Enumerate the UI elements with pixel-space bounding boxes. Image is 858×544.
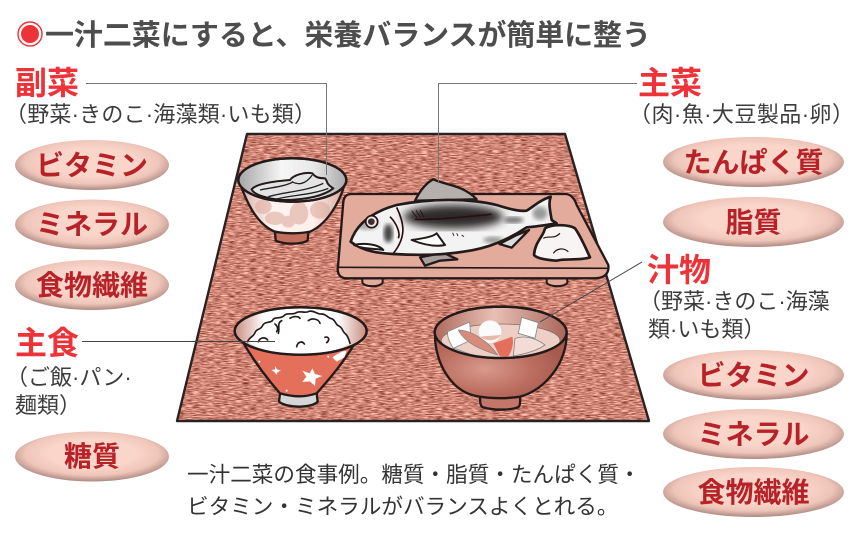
table mat bbox=[177, 134, 649, 421]
pill: ミネラル bbox=[663, 409, 844, 459]
pill: たんぱく質: たんぱく質 bbox=[683, 147, 824, 178]
pill: ミネラル: ミネラル bbox=[36, 209, 148, 240]
caption: 一汁二菜の食事例。糖質・脂質・たんぱく質・ bbox=[187, 462, 640, 487]
note: 主食 foods: 麺類） bbox=[15, 393, 81, 418]
heading: 副菜: 副菜 bbox=[15, 65, 79, 101]
title text: 一汁二菜にすると、栄養バランスが簡単に整う bbox=[45, 18, 651, 52]
side dish bowl bbox=[238, 158, 346, 244]
note: 主食 foods: （ご飯·パン· bbox=[6, 365, 132, 390]
pill: 糖質 bbox=[15, 432, 169, 482]
heading: 主菜: 主菜 bbox=[638, 65, 702, 101]
note: 汁物 foods: （野菜·きのこ·海藻 bbox=[639, 289, 830, 314]
pill: 食物繊維 bbox=[15, 260, 169, 310]
pill: 食物繊維: 食物繊維 bbox=[36, 270, 148, 301]
heading: 主食: 主食 bbox=[15, 325, 79, 361]
pill: 脂質 bbox=[663, 197, 844, 247]
note: 主菜 foods: （肉·魚·大豆製品·卵） bbox=[629, 102, 854, 127]
pill: ミネラル: ミネラル bbox=[697, 419, 810, 450]
rice bowl bbox=[235, 307, 367, 407]
leader line: 汁物 bbox=[540, 262, 642, 322]
miso soup bowl bbox=[435, 307, 567, 410]
pill: 脂質: 脂質 bbox=[725, 207, 782, 238]
panel: 主菜 bbox=[629, 65, 854, 247]
pill: 食物繊維: 食物繊維 bbox=[697, 477, 810, 508]
caption: ビタミン・ミネラルがバランスよくとれる。 bbox=[187, 494, 618, 519]
pill: 食物繊維 bbox=[663, 467, 844, 517]
icon: red circle marker bbox=[18, 22, 42, 46]
pill: ミネラル bbox=[15, 200, 169, 250]
leader line: 主食 bbox=[82, 340, 275, 342]
panel: 汁物 bbox=[639, 252, 844, 517]
pill: ビタミン bbox=[663, 350, 844, 400]
panel: 副菜 bbox=[5, 65, 316, 310]
leader line: 副菜 bbox=[86, 84, 326, 175]
note: 汁物 foods: 類·いも類） bbox=[648, 317, 765, 342]
pill: ビタミン: ビタミン bbox=[697, 360, 810, 391]
fish on board bbox=[338, 179, 609, 286]
pill: たんぱく質 bbox=[663, 137, 844, 187]
pill: ビタミン: ビタミン bbox=[36, 150, 148, 181]
board bbox=[338, 194, 609, 286]
panel: 主食 bbox=[6, 325, 169, 482]
note: 副菜 foods: （野菜·きのこ·海藻類·いも類） bbox=[5, 102, 316, 127]
pill: ビタミン bbox=[15, 140, 169, 190]
fish bbox=[351, 179, 590, 266]
pill: 糖質: 糖質 bbox=[64, 441, 120, 472]
heading: 汁物: 汁物 bbox=[647, 252, 711, 288]
title bbox=[18, 18, 651, 52]
leader line: 主菜 bbox=[438, 84, 637, 182]
